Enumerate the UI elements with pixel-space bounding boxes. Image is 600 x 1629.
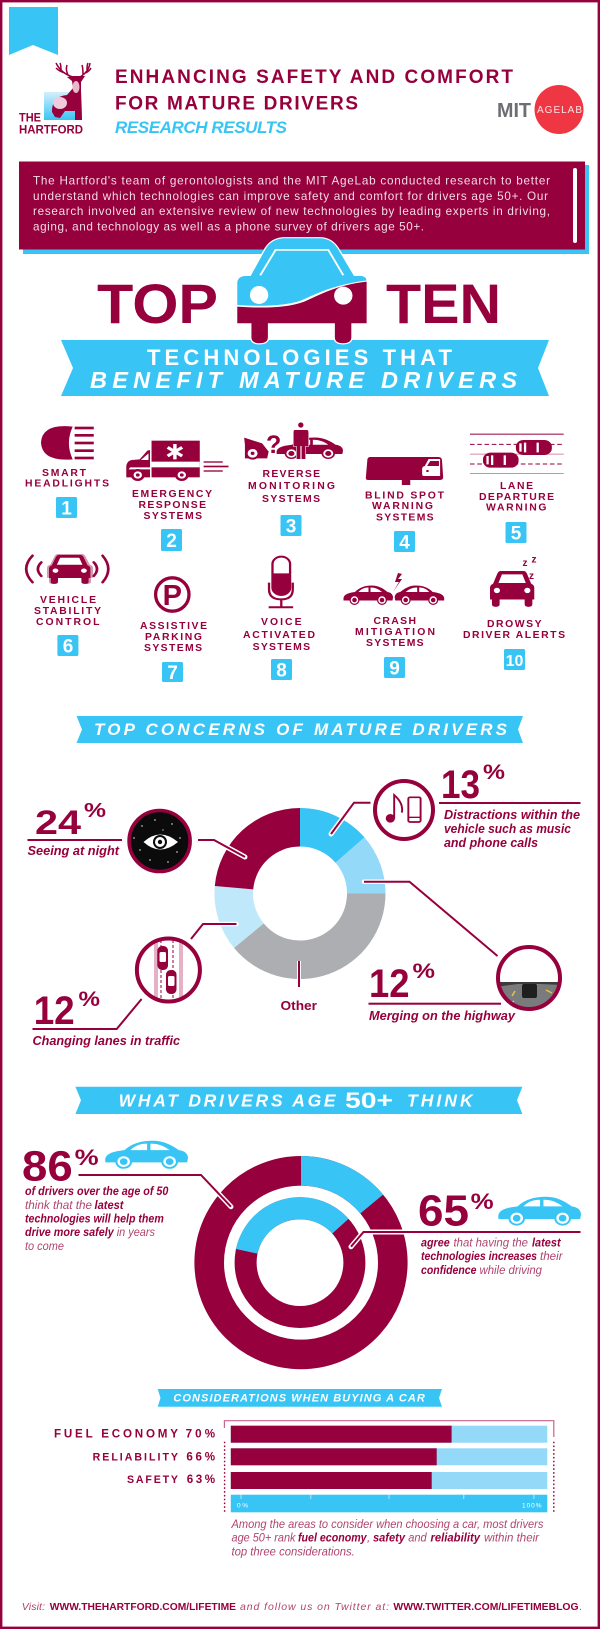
footer: .: [580, 1601, 582, 1613]
item 10: drowsy driver alerts: 10: [506, 653, 524, 670]
banner: technologies that benefit mature drivers: TECHNOLOGIES THAT: [147, 345, 453, 370]
banner: what drivers age 50+ think: WHAT DRIVERS AGE: [119, 1091, 337, 1111]
bar: fuel economy: 70%: [186, 1427, 215, 1440]
chart note: within their: [484, 1532, 540, 1545]
item 9: crash mitigation systems: MITIGATION: [355, 627, 435, 638]
banner: technologies that benefit mature drivers: [61, 340, 549, 396]
chart note: age 50+ rank: [232, 1532, 297, 1545]
icon: music note and phone: [375, 781, 433, 839]
chart note: safety: [373, 1532, 405, 1545]
logo: MIT AgeLab: AGELAB: [537, 105, 582, 116]
callout: merging on the highway 12%: 12: [369, 962, 410, 1006]
headline: top ten: [97, 272, 501, 335]
item 2: emergency response systems: 2: [166, 531, 177, 552]
item 10: drowsy driver alerts: z: [522, 558, 528, 569]
item 10: drowsy driver alerts: DRIVER ALERTS: [463, 630, 565, 641]
donut chart: inner ring 65%: [236, 1197, 354, 1317]
item 10: drowsy driver alerts: z: [529, 571, 534, 582]
item 9: crash mitigation systems: 9: [389, 658, 400, 680]
item 9: crash mitigation systems: SYSTEMS: [366, 638, 424, 649]
chart note: top three considerations.: [232, 1545, 355, 1558]
item 1: smart headlights: [25, 426, 109, 520]
callout: changing lanes 12%: %: [78, 988, 100, 1011]
callout: changing lanes 12%: Changing lanes in traffic: [32, 1034, 180, 1048]
logo: The Hartford: [19, 63, 91, 136]
item 4: blind spot warning systems: SYSTEMS: [376, 513, 434, 524]
banner: what drivers age 50+ think: 50+: [345, 1088, 393, 1113]
callout: 65%: [351, 1187, 581, 1277]
item 9: crash mitigation systems: CRASH: [374, 616, 416, 627]
title: ENHANCING SAFETY AND COMFORT: [115, 67, 513, 88]
callout: 65%: their: [540, 1251, 564, 1263]
intro panel: aging, and technology as well as a phone survey of drivers age 50+.: [33, 220, 424, 234]
bar: safety: 63%: [187, 1473, 215, 1486]
bar: fuel economy: FUEL ECONOMY: [54, 1427, 178, 1440]
item 5: lane departure warning: 5: [511, 524, 522, 544]
callout: 86%: technologies will help them: [25, 1214, 164, 1226]
item 5: lane departure warning: WARNING: [486, 503, 546, 514]
item 10: drowsy driver alerts: DROWSY: [487, 619, 542, 630]
logo: The Hartford: HARTFORD: [19, 122, 83, 136]
intro panel: The Hartford's team of gerontologists and the MIT AgeLab conducted research to better: [33, 174, 550, 188]
item 5: lane departure warning: [470, 434, 564, 544]
callout: 86%: 86: [22, 1143, 73, 1191]
item 3: reverse monitoring systems: MONITORING: [248, 481, 335, 492]
footer: and follow us on Twitter at:: [240, 1601, 389, 1613]
intro panel: understand which technologies can improve safety and comfort for drivers age 50+. Our: [33, 190, 548, 203]
callout: 86%: think that the: [25, 1200, 92, 1212]
headline: top ten: TEN: [386, 272, 501, 335]
item 2: emergency response systems: EMERGENCY: [132, 489, 212, 500]
label: other: Other: [280, 998, 317, 1013]
banner: considerations when buying a car: CONSIDERATIONS WHEN BUYING A CAR: [173, 1392, 425, 1404]
headline: top ten: TOP: [97, 272, 218, 335]
subtitle: research results: RESEARCH RESULTS: [115, 118, 288, 137]
callout: distractions 13%: 13: [441, 763, 480, 807]
callout: distractions 13%: vehicle such as music: [444, 822, 571, 836]
item 7: assistive parking systems: 7: [167, 663, 178, 684]
callout: merging on the highway 12%: [364, 882, 565, 1023]
banner: top concerns: [76, 716, 523, 743]
chart note: ,: [367, 1532, 370, 1545]
donut chart: top concerns: [214, 808, 386, 979]
item 3: reverse monitoring systems: SYSTEMS: [262, 494, 320, 505]
item 3: reverse monitoring systems: REVERSE: [262, 469, 320, 480]
callout: 86%: %: [75, 1145, 99, 1170]
callout: 86%: drive more safely: [25, 1227, 114, 1239]
item 3: reverse monitoring systems: [244, 422, 343, 538]
item 5: lane departure warning: DEPARTURE: [479, 492, 554, 503]
item 10: drowsy driver alerts: z: [532, 554, 536, 566]
callout: seeing at night 24%: Seeing at night: [28, 844, 120, 858]
logo: MIT AgeLab: [497, 85, 584, 134]
icon: eye at night: [129, 810, 190, 872]
callout: 86%: latest: [94, 1200, 125, 1212]
footer: WWW.THEHARTFORD.COM/LIFETIME: [50, 1601, 236, 1613]
axis bar: 100%: [522, 1503, 542, 1510]
item 6: vehicle stability control: VEHICLE: [40, 595, 96, 606]
callout: seeing at night 24%: [28, 800, 245, 872]
bar: reliability: RELIABILITY: [93, 1451, 178, 1463]
chart note: reliability: [430, 1532, 480, 1545]
item 9: crash mitigation systems: [343, 573, 444, 680]
title: [115, 67, 513, 114]
callout: merging on the highway 12%: Merging on the highway: [369, 1009, 516, 1023]
bar: reliability: [93, 1448, 547, 1465]
item 2: emergency response systems: RESPONSE: [138, 500, 206, 511]
chart note: [231, 1518, 544, 1558]
logo: MIT AgeLab: MIT: [497, 100, 531, 122]
banner: considerations when buying a car: [158, 1389, 442, 1407]
item 10: drowsy driver alerts: [463, 554, 565, 670]
callout: 65%: technologies increases: [421, 1251, 537, 1263]
item 4: blind spot warning systems: BLIND SPOT: [365, 491, 445, 502]
item 7: assistive parking systems: ASSISTIVE: [140, 621, 207, 632]
item 2: emergency response systems: [126, 441, 228, 552]
callout: seeing at night 24%: 24: [35, 804, 81, 842]
item 6: vehicle stability control: STABILITY: [34, 606, 101, 617]
item 6: vehicle stability control: [26, 554, 108, 658]
item 8: voice activated systems: VOICE: [261, 617, 302, 628]
item 1: smart headlights: 1: [61, 498, 72, 520]
item 6: vehicle stability control: 6: [63, 636, 73, 658]
item 8: voice activated systems: SYSTEMS: [253, 642, 310, 653]
item 4: blind spot warning systems: WARNING: [372, 501, 433, 512]
bar: reliability: 66%: [186, 1450, 215, 1463]
callout: 86%: of drivers over the age of 50: [25, 1186, 169, 1198]
item 5: lane departure warning: LANE: [500, 481, 533, 492]
callout: 86%: [22, 1141, 231, 1253]
title: FOR MATURE DRIVERS: [115, 94, 358, 114]
label: other: [280, 961, 317, 1013]
axis bar: 0%: [237, 1503, 248, 1510]
callout: changing lanes 12%: [32, 924, 236, 1048]
footer: [22, 1601, 582, 1613]
item 1: smart headlights: SMART: [42, 468, 87, 479]
item 8: voice activated systems: 8: [276, 660, 287, 682]
callout: distractions 13%: Distractions within the: [444, 808, 580, 822]
callout: 65%: latest: [532, 1238, 562, 1250]
item 1: smart headlights: HEADLIGHTS: [25, 479, 109, 490]
donut chart: outer ring 86%: [209, 1156, 393, 1354]
icon: cars changing lanes: [137, 935, 200, 1005]
callout: 65%: while driving: [480, 1265, 543, 1277]
callout: distractions 13%: [331, 761, 580, 850]
callout: changing lanes 12%: 12: [34, 989, 75, 1033]
item 6: vehicle stability control: CONTROL: [36, 617, 100, 628]
callout: seeing at night 24%: %: [84, 800, 106, 822]
callout: 65%: agree: [421, 1238, 450, 1250]
item 3: reverse monitoring systems: 3: [286, 516, 296, 538]
chart note: Among the areas to consider when choosing a car, most drivers: [231, 1518, 544, 1531]
item 7: assistive parking systems: PARKING: [145, 632, 202, 643]
item 3: reverse monitoring systems: ?: [266, 431, 281, 459]
banner: what drivers age 50+ think: THINK: [407, 1091, 474, 1111]
footer: WWW.TWITTER.COM/LIFETIMEBLOG: [393, 1601, 579, 1613]
chart note: and: [408, 1532, 427, 1545]
icon: highway view: [495, 947, 565, 1013]
item 7: assistive parking systems: P: [163, 580, 182, 612]
item 7: assistive parking systems: [140, 578, 207, 684]
item 4: blind spot warning systems: [365, 457, 445, 554]
axis bar: [231, 1495, 547, 1512]
icon: blue car: [105, 1141, 188, 1169]
banner: technologies that benefit mature drivers: BENEFIT MATURE DRIVERS: [90, 367, 517, 393]
callout: merging on the highway 12%: %: [412, 960, 435, 983]
icon: hero car: [237, 238, 367, 343]
banner: what drivers age 50+ think: [75, 1087, 522, 1114]
callout: 65%: that having the: [454, 1238, 528, 1250]
callout: 65%: %: [471, 1189, 494, 1214]
banner: top concerns: TOP CONCERNS OF MATURE DRIVERS: [94, 720, 508, 739]
callout: 86%: to come: [25, 1241, 64, 1253]
item 7: assistive parking systems: SYSTEMS: [144, 643, 202, 654]
intro panel: research involved an extensive review of new technologies by leading experts in driving,: [33, 205, 550, 218]
callout: 65%: 65: [418, 1187, 469, 1236]
bar: safety: SAFETY: [127, 1474, 178, 1486]
icon: blue car: [498, 1197, 581, 1226]
item 4: blind spot warning systems: 4: [399, 532, 410, 554]
item 8: voice activated systems: ACTIVATED: [243, 630, 315, 641]
callout: distractions 13%: and phone calls: [444, 836, 538, 850]
bar: fuel economy: [54, 1426, 547, 1443]
bar: safety: [127, 1472, 547, 1489]
corner ribbon bookmark: [9, 7, 58, 55]
logo: The Hartford: THE: [19, 110, 41, 124]
bar chart: considerations: [54, 1421, 554, 1513]
item 2: emergency response systems: SYSTEMS: [144, 511, 202, 522]
callout: distractions 13%: %: [483, 761, 505, 784]
item 8: voice activated systems: [243, 557, 315, 682]
intro panel: [19, 162, 589, 254]
chart note: fuel economy: [298, 1532, 367, 1545]
callout: 86%: in years: [117, 1227, 155, 1239]
footer: Visit:: [22, 1601, 45, 1613]
callout: 65%: confidence: [421, 1265, 477, 1277]
